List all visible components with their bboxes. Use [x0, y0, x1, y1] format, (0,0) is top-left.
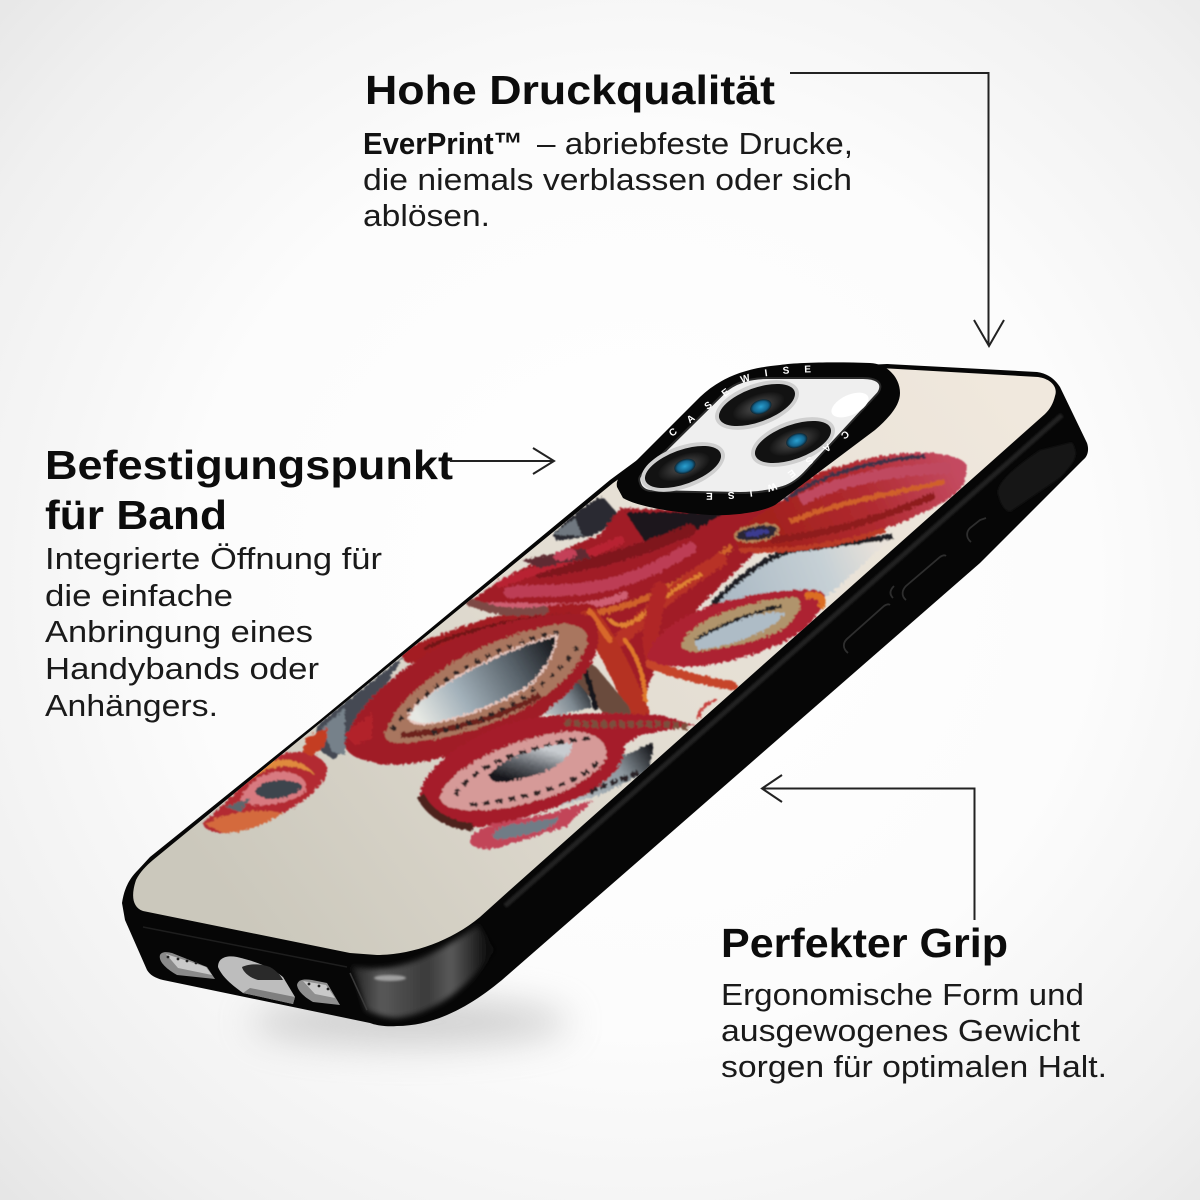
octopus arms [410, 530, 733, 718]
description: – abriebfeste Drucke, [537, 126, 853, 161]
description: Ergonomische Form und [721, 977, 1084, 1012]
charging ports [160, 952, 340, 1005]
arrow: grip [762, 775, 974, 920]
description: ausgewogenes Gewicht [721, 1013, 1080, 1048]
description: Anbringung eines [45, 614, 313, 649]
lens left [634, 432, 732, 502]
description: die niemals verblassen oder sich [363, 162, 852, 197]
grey shadows [314, 655, 405, 760]
description: Integrierte Öffnung für [45, 541, 382, 576]
description: sorgen für optimalen Halt. [721, 1049, 1107, 1084]
usb port [218, 956, 295, 1004]
arrow: strap attachment [450, 448, 554, 474]
arrow: print quality [790, 73, 1004, 346]
octopus head [733, 453, 967, 552]
blue-grey background under head [700, 535, 895, 650]
description: die einfache [45, 578, 233, 613]
feature: strap attachment [45, 442, 453, 723]
back artwork [133, 368, 1056, 955]
heading: Befestigungspunkt [45, 442, 453, 488]
description [363, 126, 853, 233]
octopus body mass [466, 500, 784, 695]
description: Handybands oder [45, 651, 319, 686]
lens right [744, 407, 842, 477]
side rim line [505, 415, 1062, 906]
brand lettering [669, 366, 849, 500]
tentacle ring centre [420, 713, 695, 827]
bottom seam [143, 927, 347, 967]
feature: grip [721, 920, 1107, 1084]
description: Anhängers. [45, 688, 218, 723]
tentacle bottom loop [470, 800, 593, 849]
speaker left [160, 952, 215, 979]
brand lettering: CASEWISE [669, 366, 811, 436]
phone drop shadow [250, 998, 570, 1046]
tentacle ring right [647, 590, 825, 667]
heading: für Band [45, 492, 227, 538]
lens top [708, 370, 806, 440]
brand lettering: CASEWISE [706, 431, 849, 500]
description [45, 541, 382, 723]
phone case [122, 362, 1088, 1026]
tentacle ring small [203, 752, 327, 833]
description: ablösen. [363, 198, 490, 233]
heading: Hohe Druckqualität [365, 67, 775, 113]
camera window [639, 378, 880, 493]
tentacle ring left [345, 614, 598, 765]
feature: print quality [363, 67, 853, 233]
octopus painting [203, 453, 967, 849]
small curled arm [522, 548, 590, 568]
heading: Perfekter Grip [721, 920, 1008, 966]
tentacle tail [303, 727, 328, 757]
icon: side buttons [844, 518, 986, 653]
corner highlight [350, 925, 495, 1018]
description: EverPrint™ [363, 126, 523, 161]
description [721, 977, 1107, 1084]
octopus eye [734, 521, 780, 545]
dark shading below camera [625, 512, 725, 542]
heading [45, 442, 453, 538]
side vent [998, 442, 1076, 512]
camera bump [616, 362, 900, 516]
speaker right [297, 980, 340, 1005]
case body [122, 364, 1088, 1026]
